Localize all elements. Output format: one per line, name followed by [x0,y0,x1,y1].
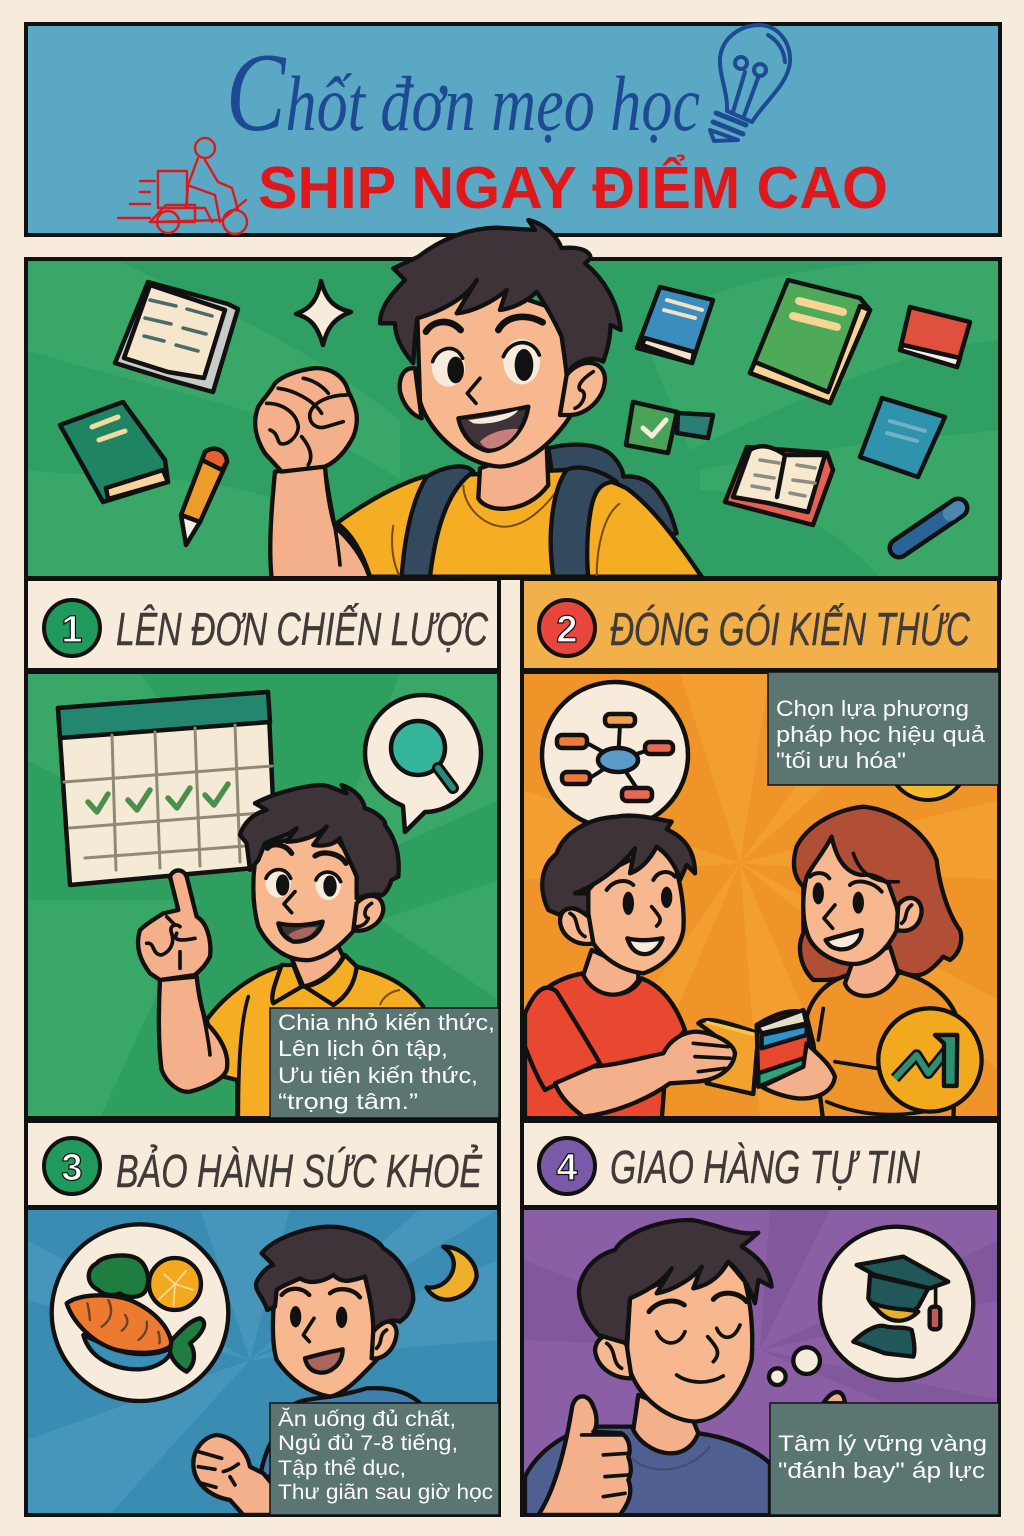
food plate [52,1224,228,1401]
text box 4: Tâm lý vững vàng [778,1431,987,1456]
eyebrows [426,317,543,332]
text box 4: "đánh bay" áp lực [778,1458,985,1483]
badge 1 [44,600,100,656]
icon: check box [626,402,713,453]
icon: red book [900,307,970,367]
text box 2: pháp học hiệu quả [776,722,986,747]
icon: graduate [853,1257,948,1357]
thought bubble [769,1227,973,1385]
text box 3: Thư giãn sau giờ học [278,1481,493,1504]
yellow circle sliver [894,786,962,802]
speech bubble with magnifier [365,695,481,832]
text box 1: “trọng tâm.” [278,1089,418,1114]
boy with red shirt [525,816,695,1122]
moon [427,1247,477,1300]
hero student [337,220,702,577]
neck [478,445,548,509]
boy hand [555,1032,735,1117]
mouth [458,407,528,451]
icon: sparkle [296,281,351,345]
calendar [58,692,276,885]
badge 3 [44,1138,100,1194]
icon: delivery scooter [118,138,247,234]
text box 2: "tối ưu hóa" [776,748,906,773]
badge 1: 1 [61,609,83,651]
icon: pencil [181,449,227,545]
left ear [400,368,422,418]
text box 1: Lên lịch ôn tập, [278,1036,448,1061]
icon: open book red [725,446,833,525]
text box 3: Ăn uống đủ chất, [278,1408,456,1431]
panel 4: confidence [522,1208,999,1517]
badge 4: 4 [556,1147,578,1189]
text box 2: Chọn lựa phương [776,696,969,721]
text box 3 [270,1403,499,1515]
title script line: Chốt đơn mẹo học [226,31,700,155]
text box 2 [768,672,999,785]
panel 2: package [522,672,999,1122]
boy with thumb up [525,1220,845,1517]
header panel [26,24,1000,235]
girl hand [762,1043,835,1098]
step 4 heading [522,1121,999,1207]
subtitle: SHIP NGAY ĐIỂM CAO [258,155,888,221]
text box 1 [270,1008,499,1118]
hero panel [26,259,1000,578]
backpack [548,445,677,548]
icon: blue pen [899,508,958,548]
growth badge [878,1008,982,1112]
icon: blue book [637,287,713,363]
girl with red hair [794,807,961,1122]
heading text 1: LÊN ĐƠN CHIẾN LƯỢC [116,603,489,655]
text box 4 [770,1403,999,1515]
step 3 heading [26,1121,499,1207]
icon: large green book [750,280,870,403]
yellow shirt [337,470,702,577]
badge 4 [539,1138,595,1194]
books being exchanged [555,1010,835,1117]
hair [380,220,621,375]
badge 2 [539,600,595,656]
mind map bubble [542,682,688,828]
text box 1: Chia nhỏ kiến thức, [278,1010,495,1035]
right ear [560,363,605,415]
icon: open notebook [115,282,238,392]
hero arm and fist [255,368,370,578]
straps [402,466,473,577]
step 2 heading [522,579,999,670]
boy pointing [138,785,423,1118]
panel 1: plan [26,672,499,1118]
badge 3: 3 [61,1147,83,1189]
icon: green book [60,402,168,502]
text box 3: Ngủ đủ 7-8 tiếng, [278,1432,458,1455]
panel 3: health [26,1208,499,1515]
face [417,282,573,467]
icon: light bulb [710,25,790,141]
eyes [432,347,465,387]
nose [467,378,480,403]
text box 3: Tập thể dục, [278,1457,406,1480]
icon: teal book [860,398,945,477]
heading text 3: BẢO HÀNH SỨC KHOẺ [116,1144,483,1197]
boy with fist [193,1227,423,1515]
step 1 heading [26,579,499,670]
text box 1: Ưu tiên kiến thức, [278,1063,478,1088]
badge 2: 2 [556,609,578,651]
heading text 4: GIAO HÀNG TỰ TIN [610,1141,921,1193]
